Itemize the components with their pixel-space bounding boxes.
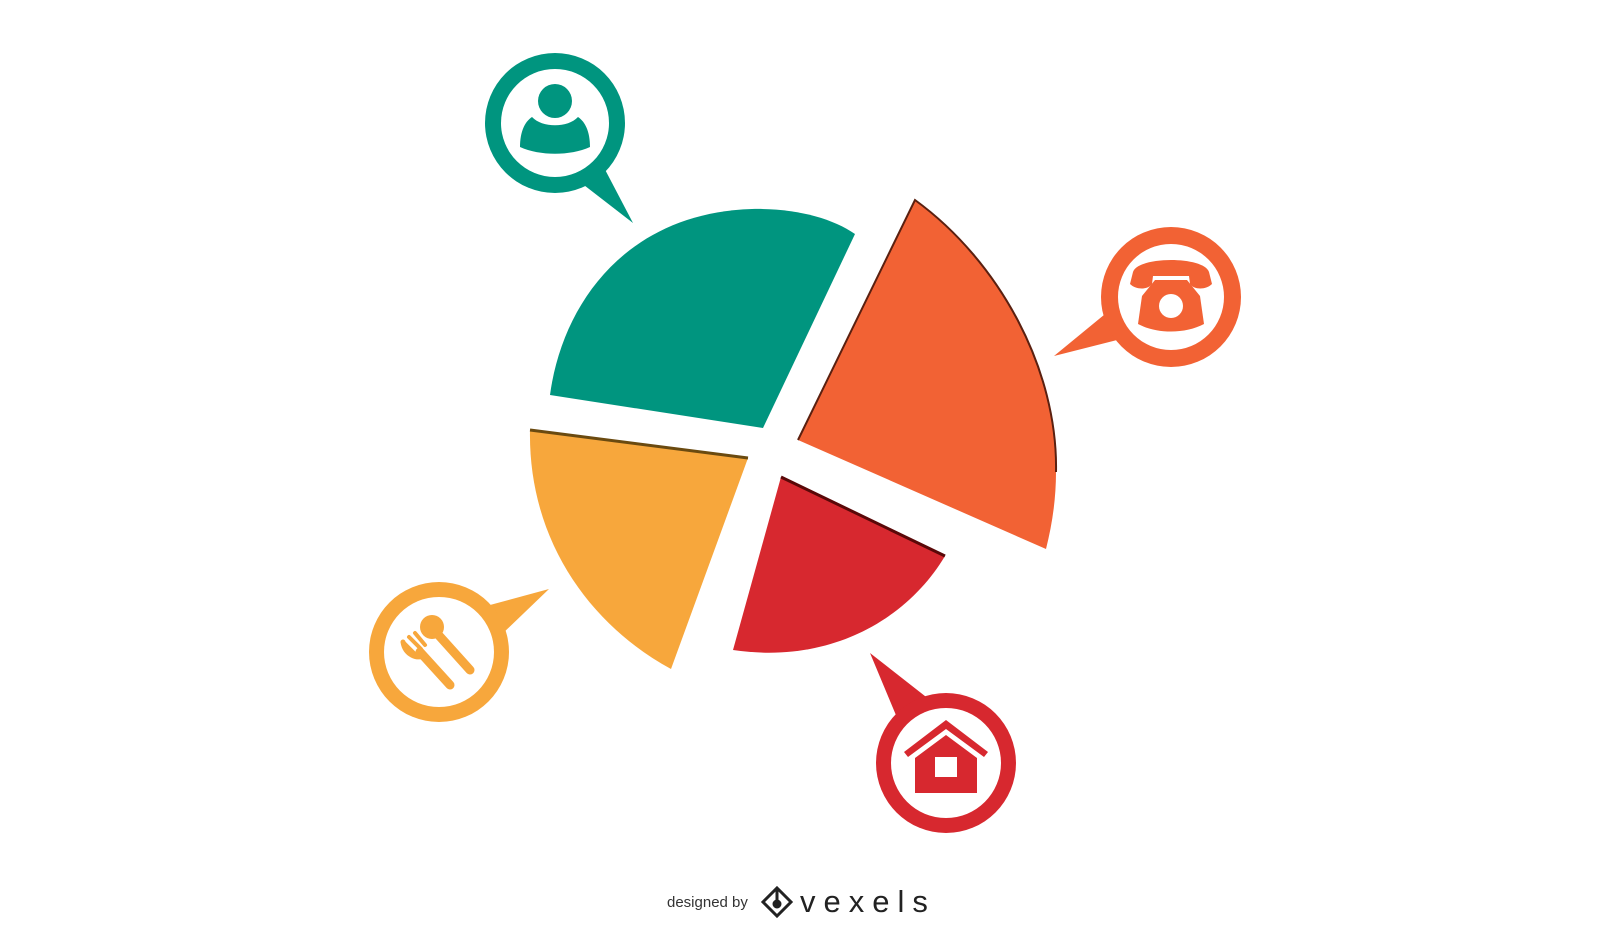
slice: yellow	[530, 430, 748, 669]
callout: yellow cutlery	[369, 582, 549, 722]
slice: orange	[798, 200, 1056, 549]
callout: teal person	[485, 53, 633, 223]
icon: phone	[1130, 260, 1212, 332]
footer: vexels credit: designed by	[667, 894, 748, 911]
slice: red	[733, 477, 945, 653]
callout: orange phone	[1054, 227, 1241, 367]
slice: teal	[550, 209, 855, 428]
icon: person	[520, 84, 590, 154]
icon: house	[904, 720, 988, 793]
icon: spoon and fork	[403, 615, 470, 685]
icon: vexels logo	[763, 888, 791, 916]
footer: vexels credit: vexels	[800, 884, 936, 919]
footer: vexels credit	[667, 884, 936, 919]
callout: red house	[870, 653, 1016, 833]
pie chart	[530, 200, 1056, 669]
